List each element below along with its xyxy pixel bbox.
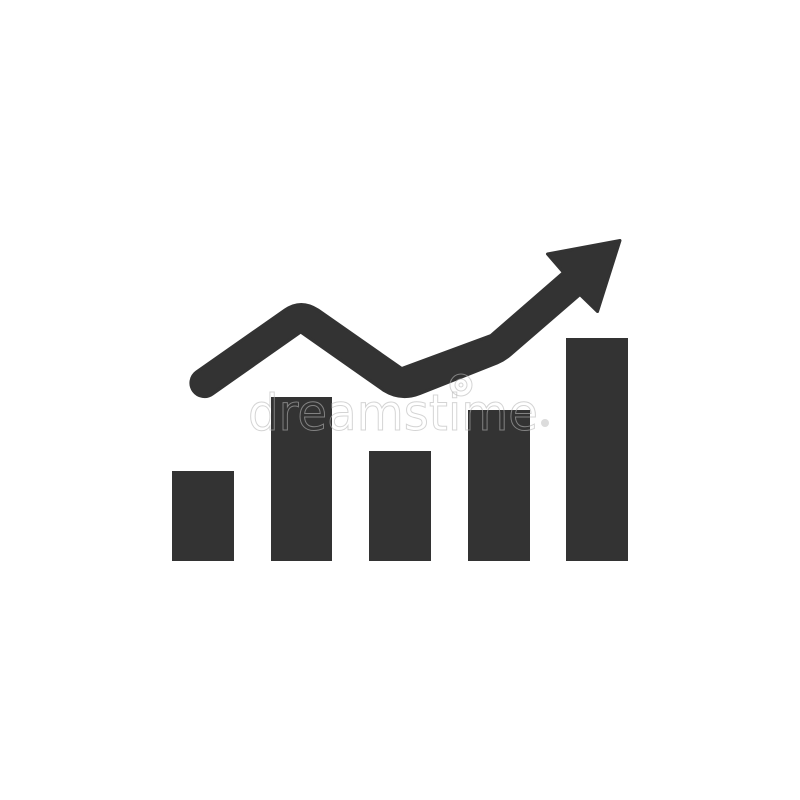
bar chart — [172, 338, 628, 561]
bar 4 — [468, 410, 530, 561]
watermark dot — [541, 419, 549, 427]
watermark logo spiral — [450, 374, 472, 396]
watermark — [248, 374, 549, 442]
bar 2 — [271, 397, 332, 561]
trend arrow — [191, 240, 620, 397]
watermark text: dreamstime — [248, 384, 538, 442]
bar 5 — [566, 338, 628, 561]
bar 1 — [172, 471, 234, 561]
bar 3 — [369, 451, 431, 561]
